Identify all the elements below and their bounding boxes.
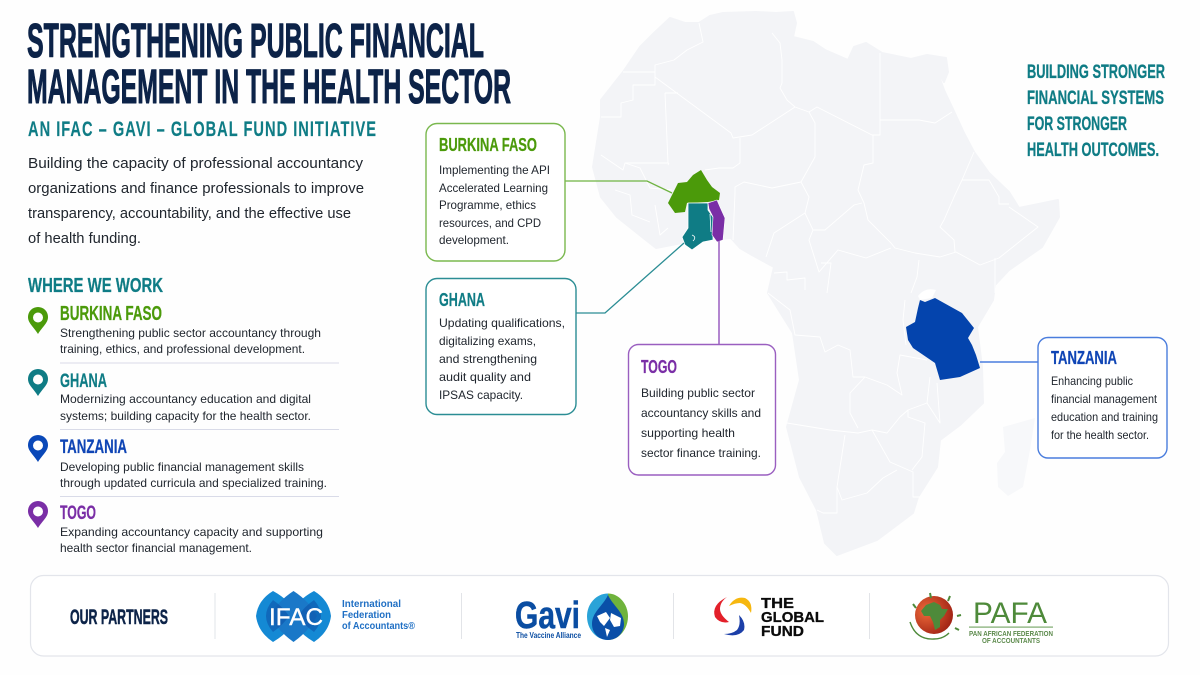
callout: Burkina Faso: Implementing the API: [439, 164, 550, 177]
intro text: [28, 155, 364, 247]
icon: teal pin: [28, 369, 48, 396]
connector: Burkina Faso: [565, 181, 672, 193]
title: [27, 15, 511, 114]
callout: Togo: accountancy skills and: [641, 407, 761, 420]
country: Togo: [708, 200, 725, 242]
list item: Ghana: [28, 369, 311, 423]
logo: Gavi: [515, 594, 628, 640]
connector: Togo: [718, 241, 720, 344]
country: Tanzania: [906, 298, 980, 380]
title: STRENGTHENING PUBLIC FINANCIAL: [27, 15, 484, 68]
logo: IFAC: Federation: [342, 610, 391, 621]
logo: The Global Fund: FUND: [761, 624, 804, 640]
list item: Burkina Faso: Strengthening public sector accountancy through: [60, 327, 321, 340]
callout: Tanzania: [1038, 338, 1167, 458]
list item: Tanzania: TANZANIA: [60, 437, 127, 458]
country: Ghana: [682, 203, 713, 250]
connector: Ghana: [576, 243, 684, 313]
icon: purple pin: [28, 501, 48, 528]
callout: Ghana: IPSAS capacity.: [439, 389, 523, 402]
callout: Burkina Faso: BURKINA FASO: [439, 134, 537, 155]
list item: Togo: Expanding accountancy capacity and supporting: [60, 526, 323, 539]
callout: Burkina Faso: [426, 124, 565, 261]
callout: Burkina Faso: Accelerated Learning: [439, 182, 548, 195]
callout: Ghana: [426, 278, 576, 414]
logo: IFAC: IFAC: [269, 604, 323, 631]
callout: Tanzania: for the health sector.: [1051, 429, 1149, 442]
list item: Burkina Faso: BURKINA FASO: [60, 303, 162, 325]
callout: Ghana: audit quality and: [439, 371, 531, 384]
heading: where we work: WHERE WE WORK: [28, 274, 163, 297]
logo: The Global Fund: THE: [761, 596, 794, 612]
callout: Ghana: and strengthening: [439, 353, 537, 366]
tagline: [1027, 61, 1165, 161]
intro text: Building the capacity of professional accountancy: [28, 155, 364, 172]
tagline: FOR STRONGER: [1027, 113, 1127, 135]
logo: The Global Fund: GLOBAL: [761, 610, 824, 626]
callout: Togo: sector finance training.: [641, 447, 761, 460]
list item: Togo: TOGO: [60, 503, 96, 524]
title: MANAGEMENT IN THE HEALTH SECTOR: [27, 61, 511, 114]
logo: Gavi: Gavi: [515, 595, 580, 637]
callout: Tanzania: education and training: [1051, 411, 1158, 424]
panel: partners: [30, 576, 1168, 656]
subtitle: AN IFAC – GAVI – GLOBAL FUND INITIATIVE: [28, 117, 377, 141]
logo: IFAC: [256, 591, 416, 642]
logo: IFAC: of Accountants®: [342, 621, 416, 632]
list item: Togo: [28, 501, 323, 555]
heading: our partners: OUR PARTNERS: [70, 605, 168, 629]
icon: blue pin: [28, 435, 48, 462]
callout: Ghana: GHANA: [439, 289, 485, 310]
callout: Togo: TOGO: [641, 356, 677, 377]
connector: Tanzania: [980, 361, 1038, 363]
list item: Ghana: systems; building capacity for the health sector.: [60, 410, 311, 423]
list item: Tanzania: Developing public financial management skills: [60, 461, 304, 474]
list item: Ghana: Modernizing accountancy education and digital: [60, 393, 311, 406]
list item: Ghana: GHANA: [60, 370, 107, 392]
callout: Tanzania: TANZANIA: [1051, 348, 1117, 368]
map of Africa: [593, 12, 1059, 555]
callout: Togo: supporting health: [641, 427, 735, 440]
list item: Tanzania: [28, 435, 327, 490]
logo: The Global Fund: [714, 596, 824, 640]
callout: Burkina Faso: development.: [439, 234, 509, 247]
logo: PAFA: PAFA: [973, 597, 1047, 630]
icon: green pin: [28, 307, 48, 334]
intro text: transparency, accountability, and the effective use: [28, 205, 351, 222]
callout: Tanzania: financial management: [1051, 393, 1158, 406]
callout: Togo: [628, 344, 776, 475]
callout: Tanzania: Enhancing public: [1051, 375, 1133, 388]
list item: Tanzania: through updated curricula and specialized training.: [60, 477, 327, 490]
list item: Burkina Faso: training, ethics, and professional development.: [60, 343, 305, 356]
intro text: organizations and finance professionals to improve: [28, 180, 364, 197]
list item: Togo: health sector financial management.: [60, 542, 252, 555]
logo: PAFA: OF ACCOUNTANTS: [982, 638, 1040, 645]
logo: PAFA: PAN AFRICAN FEDERATION: [969, 631, 1053, 638]
callout: Burkina Faso: Programme, ethics: [439, 199, 536, 212]
logo: Gavi: The Vaccine Alliance: [516, 630, 581, 640]
callout: Burkina Faso: resources, and CPD: [439, 217, 541, 230]
logo: PAFA: [910, 593, 1053, 645]
callout: Ghana: Updating qualifications,: [439, 317, 565, 330]
list item: Burkina Faso: [28, 303, 321, 356]
logo: IFAC: International: [342, 599, 401, 610]
country: Burkina Faso: [668, 170, 720, 213]
callout: Ghana: digitalizing exams,: [439, 335, 536, 348]
intro text: of health funding.: [28, 230, 141, 247]
callout: Togo: Building public sector: [641, 387, 755, 400]
